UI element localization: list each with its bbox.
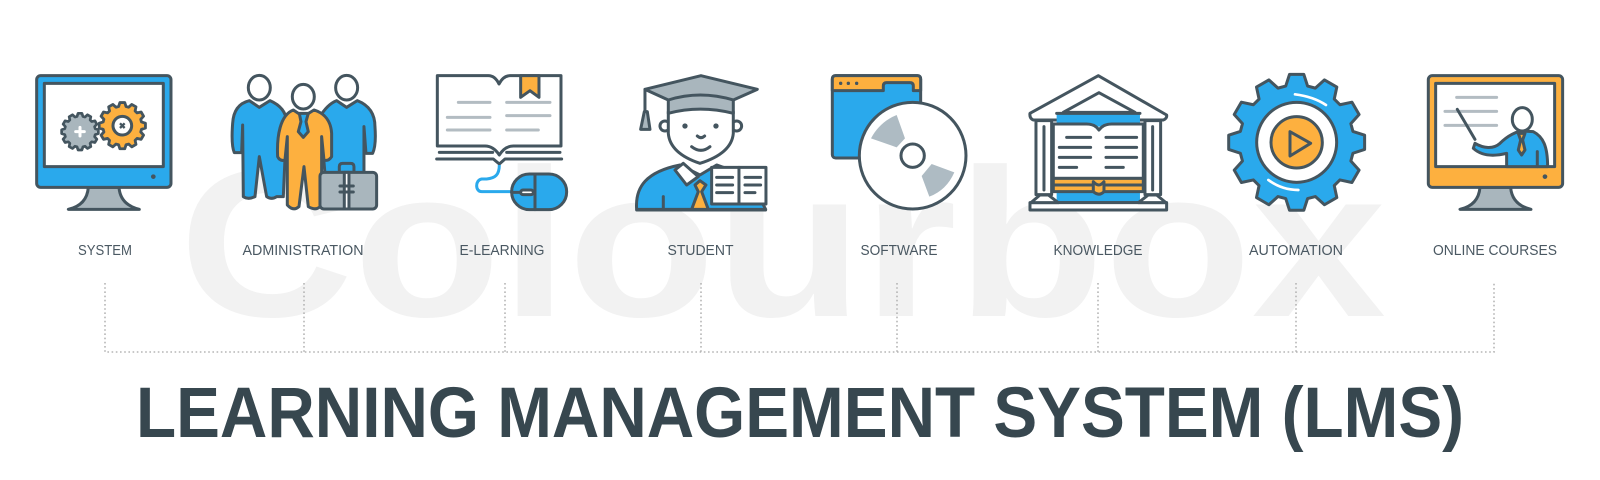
icon: software window and disc [832, 76, 966, 209]
icon: online courses monitor with teacher [1428, 76, 1563, 209]
connector: dotted bracket [105, 283, 1494, 352]
icon: system monitor with gears [37, 76, 171, 209]
icon: administration team with briefcase [232, 75, 377, 209]
label: automation: AUTOMATION [1249, 243, 1343, 259]
label: administration: ADMINISTRATION [242, 243, 364, 259]
icon: knowledge temple and book [1030, 76, 1167, 210]
icon: student with cap and book [636, 76, 766, 210]
title: LEARNING MANAGEMENT SYSTEM (LMS) [136, 374, 1464, 453]
label: knowledge: KNOWLEDGE [1054, 243, 1143, 259]
icon: e-learning book and mouse [437, 76, 567, 210]
label: online courses: ONLINE COURSES [1433, 243, 1557, 259]
icon: orange gear [99, 103, 145, 149]
watermark: Colourbox: Colourbox [179, 125, 1386, 361]
label: e-learning: E-LEARNING [460, 243, 544, 259]
icon: automation gear with play button [1229, 74, 1365, 210]
label: system: SYSTEM [78, 243, 132, 259]
icon: gray gear [62, 113, 98, 150]
label: software: SOFTWARE [860, 243, 938, 259]
label: student: STUDENT [668, 243, 734, 259]
